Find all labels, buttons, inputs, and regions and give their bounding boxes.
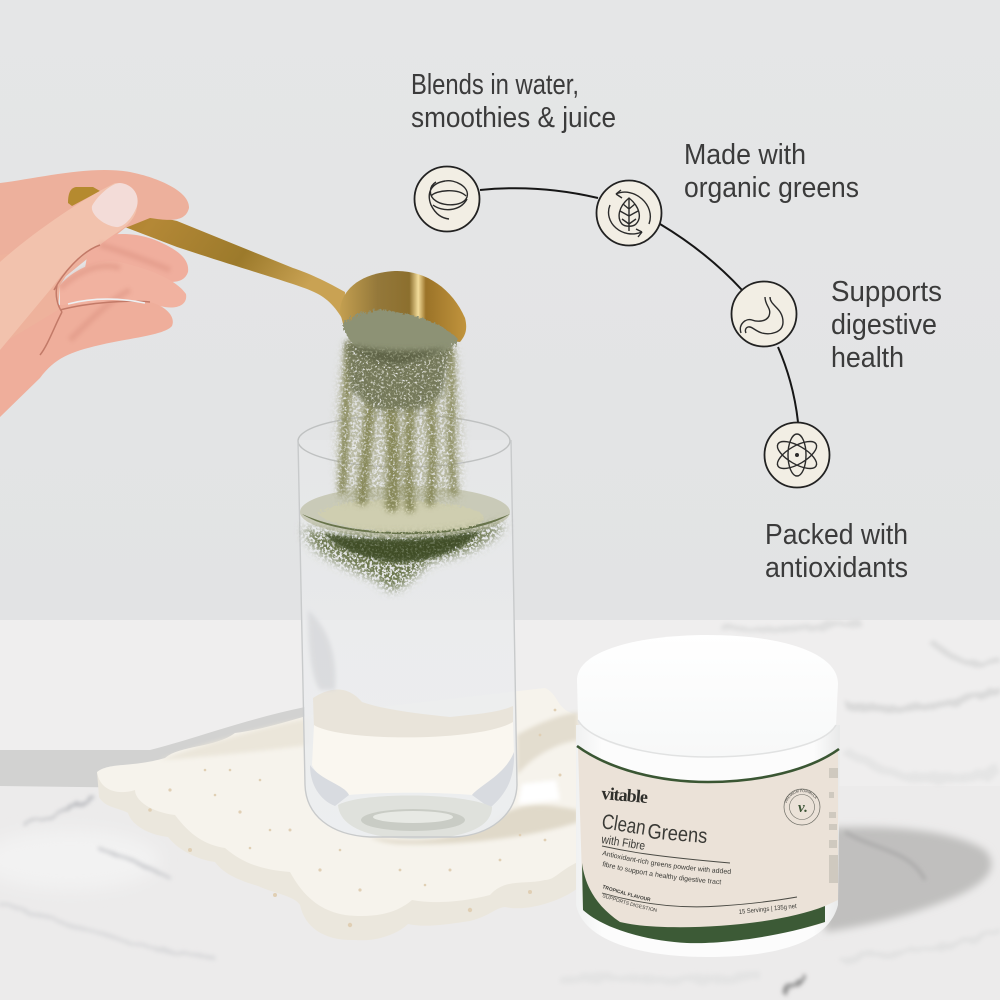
coaster highlight [518,780,560,804]
label seal [784,788,820,826]
label title clean: Clean [600,810,647,840]
thumb nail [92,183,138,227]
jar shadow [825,827,991,932]
label benefit: SUPPORTS DIGESTION [602,894,657,912]
marble table [0,620,1000,1000]
jar [576,635,840,957]
coaster side wall [97,772,578,940]
coaster pits [148,709,561,927]
label green band [582,863,825,943]
glass refracted coaster dim band [313,689,513,742]
jar label [578,748,838,936]
icon: swirl blend [414,166,480,232]
glass corners [310,765,349,806]
lid edge [578,720,836,757]
finger gap highlight [68,299,145,304]
powder floating on water [318,500,484,532]
text: organic greens: organic greens [684,172,859,204]
spoon [68,187,466,366]
palm shade [0,240,90,345]
glass body [298,440,517,837]
label flavour: TROPICAL FLAVOUR [603,884,650,902]
water surface [300,486,510,538]
label brand: vitable [601,783,649,807]
curved label text guides [602,855,790,878]
text: digestive health: health [831,342,904,374]
glass marble reflection [308,610,335,690]
thumb [0,183,137,350]
powder top mass [345,342,452,410]
finger creases [40,245,150,355]
text: antioxidants: antioxidants [765,552,908,584]
label side panel [829,768,838,883]
powder haze [338,345,461,500]
jar lid [577,635,838,757]
text: digestive health: digestive [831,309,937,341]
hand [0,170,189,417]
glass [298,415,517,839]
pinky finger and palm [0,300,173,417]
background wall [0,0,1000,622]
label green top line [577,746,839,782]
powder streams [342,345,454,508]
label subtitle: with Fibre [600,832,646,853]
label seal: v. [798,800,808,816]
marble veins [0,622,1000,995]
coaster top surface [97,688,578,916]
label title greens: Greens [647,820,708,848]
table shadow band [0,707,305,790]
falling powder [338,342,461,508]
middle finger [85,234,188,282]
jar body [576,725,840,957]
submerged powder cloud [303,522,505,590]
text: blends [411,69,616,134]
shadow veins [845,832,925,880]
label seal: PREMIUM FORMULA [784,790,817,803]
hand shadows [60,245,170,340]
icon: atom [764,422,830,488]
coaster shade [160,718,310,760]
label servings: 15 Servings | 135g net [738,903,797,916]
ring finger [60,261,186,310]
text: digestive health: Supports [831,276,942,308]
glass rim [298,415,510,467]
text: organic greens [684,139,859,204]
spoon bowl [340,271,466,342]
text: blends: smoothies & juice [411,102,616,134]
text: organic greens: Made with [684,139,806,171]
coaster [97,688,578,940]
text: antioxidants [765,519,908,584]
glass base [338,795,492,839]
hand back silhouette [0,170,189,330]
marble light patch [0,830,160,890]
text: digestive health [831,276,942,374]
connector arc [480,188,798,422]
label description: Antioxidant-rich greens powder with added [602,850,731,874]
powder in spoon [342,310,459,366]
text: antioxidants: Packed with [765,519,908,551]
text: blends: Blends in water, [411,69,579,101]
glass lower cream [312,722,514,795]
label description: fibre to support a healthy digestive tract [602,862,722,884]
icon: stomach [732,282,796,346]
label rule top [602,846,730,863]
icon: organic leaf [596,180,662,246]
spoon handle [68,187,345,322]
glass sides [298,440,517,837]
label rule bottom [602,893,797,907]
spoon handle end [68,187,100,206]
